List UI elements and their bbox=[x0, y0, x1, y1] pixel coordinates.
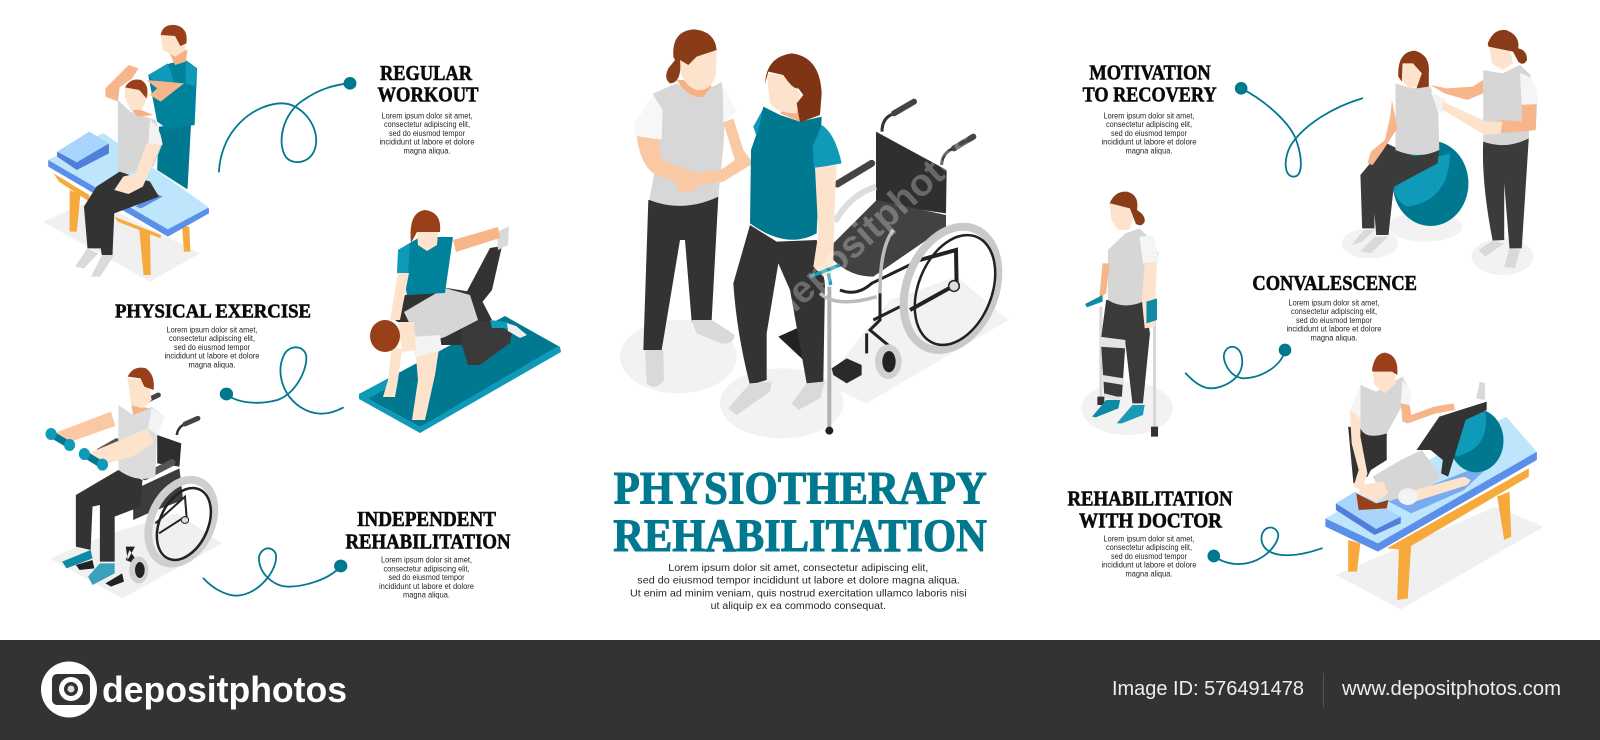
icon: depositphotos camera logo bbox=[41, 662, 97, 718]
label: physical exercise: consectetur adipiscing elit, bbox=[169, 334, 255, 343]
illustration: doctor treating patient lying on table with ball bbox=[1325, 353, 1544, 609]
illustration: man with dumbbells in wheelchair bbox=[46, 368, 226, 598]
intro paragraph bbox=[630, 562, 967, 612]
label: physical exercise: Lorem ipsum dolor sit amet, bbox=[166, 325, 258, 334]
label: convalescence: CONVALESCENCE bbox=[1252, 271, 1417, 295]
label: rehabilitation with doctor bbox=[1068, 487, 1233, 578]
label: motivation to recovery: consectetur adipiscing elit, bbox=[1106, 120, 1192, 129]
label: regular workout: WORKOUT bbox=[378, 83, 479, 107]
connector: independent rehabilitation curve bbox=[203, 548, 347, 596]
intro paragraph: sed do eiusmod tempor incididunt ut labore et dolore magna aliqua. bbox=[637, 575, 960, 587]
title: REHABILITATION bbox=[613, 510, 987, 562]
connector: motivation curve bbox=[1235, 82, 1362, 177]
intro paragraph: Lorem ipsum dolor sit amet, consectetur adipiscing elit, bbox=[668, 562, 928, 574]
label: rehabilitation with doctor: incididunt ut labore et dolore bbox=[1102, 560, 1197, 570]
label: regular workout: sed do eiusmod tempor bbox=[389, 129, 465, 138]
label: regular workout: incididunt ut labore et dolore bbox=[380, 138, 475, 146]
label: motivation to recovery: incididunt ut labore et dolore bbox=[1102, 138, 1197, 146]
intro paragraph: Ut enim ad minim veniam, quis nostrud exercitation ullamco laboris nisi bbox=[630, 588, 967, 600]
label: convalescence: Lorem ipsum dolor sit amet, bbox=[1288, 298, 1380, 307]
connector: physical exercise curve bbox=[220, 347, 343, 414]
connector: convalescence curve bbox=[1186, 344, 1291, 388]
label: rehabilitation with doctor: sed do eiusmod tempor bbox=[1111, 552, 1187, 561]
website: www.depositphotos.com bbox=[1341, 678, 1561, 700]
label: regular workout: magna aliqua. bbox=[404, 146, 450, 155]
label: independent rehabilitation bbox=[346, 507, 511, 600]
label: independent rehabilitation: consectetur adipiscing elit, bbox=[384, 564, 470, 573]
label: motivation to recovery: MOTIVATION bbox=[1089, 60, 1211, 84]
label: physical exercise: sed do eiusmod tempor bbox=[174, 343, 250, 352]
label: independent rehabilitation: Lorem ipsum dolor sit amet, bbox=[381, 556, 472, 565]
footer band bbox=[0, 640, 1600, 740]
brand name: depositphotos bbox=[102, 669, 347, 710]
label: regular workout: consectetur adipiscing elit, bbox=[384, 120, 470, 129]
label: independent rehabilitation: REHABILITATION bbox=[346, 529, 511, 553]
label: rehabilitation with doctor: WITH DOCTOR bbox=[1079, 509, 1222, 533]
watermark over central wheelchair: depositphotos bbox=[763, 122, 986, 329]
label: regular workout: REGULAR bbox=[380, 61, 472, 85]
connector: regular workout curve bbox=[219, 77, 356, 172]
illustration: seated patient on exercise ball with physiotherapist bbox=[1342, 30, 1538, 275]
title bbox=[613, 462, 987, 562]
label: physical exercise: incididunt ut labore et dolore bbox=[164, 352, 260, 360]
illustration: woman walking with crutches and leg brace bbox=[1082, 192, 1173, 437]
label: convalescence: magna aliqua. bbox=[1310, 333, 1358, 342]
label: rehabilitation with doctor: consectetur adipiscing elit, bbox=[1106, 543, 1192, 552]
label: rehabilitation with doctor: REHABILITATION bbox=[1068, 487, 1233, 511]
label: regular workout bbox=[378, 61, 479, 155]
label: independent rehabilitation: INDEPENDENT bbox=[357, 507, 497, 531]
illustration: physiotherapist stretching seated patient on table bbox=[43, 25, 209, 282]
label: motivation to recovery: sed do eiusmod tempor bbox=[1111, 129, 1187, 138]
illustration: assisted stretch on exercise mat bbox=[359, 210, 561, 433]
illustration: central physiotherapist, patient and wheelchair bbox=[620, 29, 1016, 438]
label: physical exercise: PHYSICAL EXERCISE bbox=[115, 300, 311, 322]
label: physical exercise bbox=[115, 300, 311, 369]
image id: Image ID: 576491478 bbox=[1112, 678, 1304, 700]
label: convalescence: incididunt ut labore et dolore bbox=[1286, 324, 1382, 334]
label: motivation to recovery: Lorem ipsum dolor sit amet, bbox=[1104, 111, 1194, 120]
label: convalescence: sed do eiusmod tempor bbox=[1296, 316, 1372, 325]
label: motivation to recovery bbox=[1083, 60, 1217, 155]
label: independent rehabilitation: sed do eiusmod tempor bbox=[388, 573, 465, 582]
label: independent rehabilitation: incididunt ut labore et dolore bbox=[379, 582, 475, 591]
label: rehabilitation with doctor: Lorem ipsum dolor sit amet, bbox=[1104, 534, 1194, 543]
label: rehabilitation with doctor: magna aliqua. bbox=[1126, 569, 1172, 578]
label: convalescence bbox=[1252, 271, 1417, 342]
label: independent rehabilitation: magna aliqua. bbox=[403, 591, 450, 600]
label: motivation to recovery: TO RECOVERY bbox=[1083, 83, 1217, 107]
title: PHYSIOTHERAPY bbox=[614, 462, 987, 514]
connector: doctor curve bbox=[1207, 528, 1322, 564]
label: regular workout: Lorem ipsum dolor sit amet, bbox=[382, 111, 472, 120]
label: convalescence: consectetur adipiscing elit, bbox=[1291, 307, 1377, 316]
label: physical exercise: magna aliqua. bbox=[188, 360, 236, 369]
label: motivation to recovery: magna aliqua. bbox=[1126, 146, 1172, 155]
intro paragraph: ut aliquip ex ea commodo consequat. bbox=[711, 600, 886, 612]
